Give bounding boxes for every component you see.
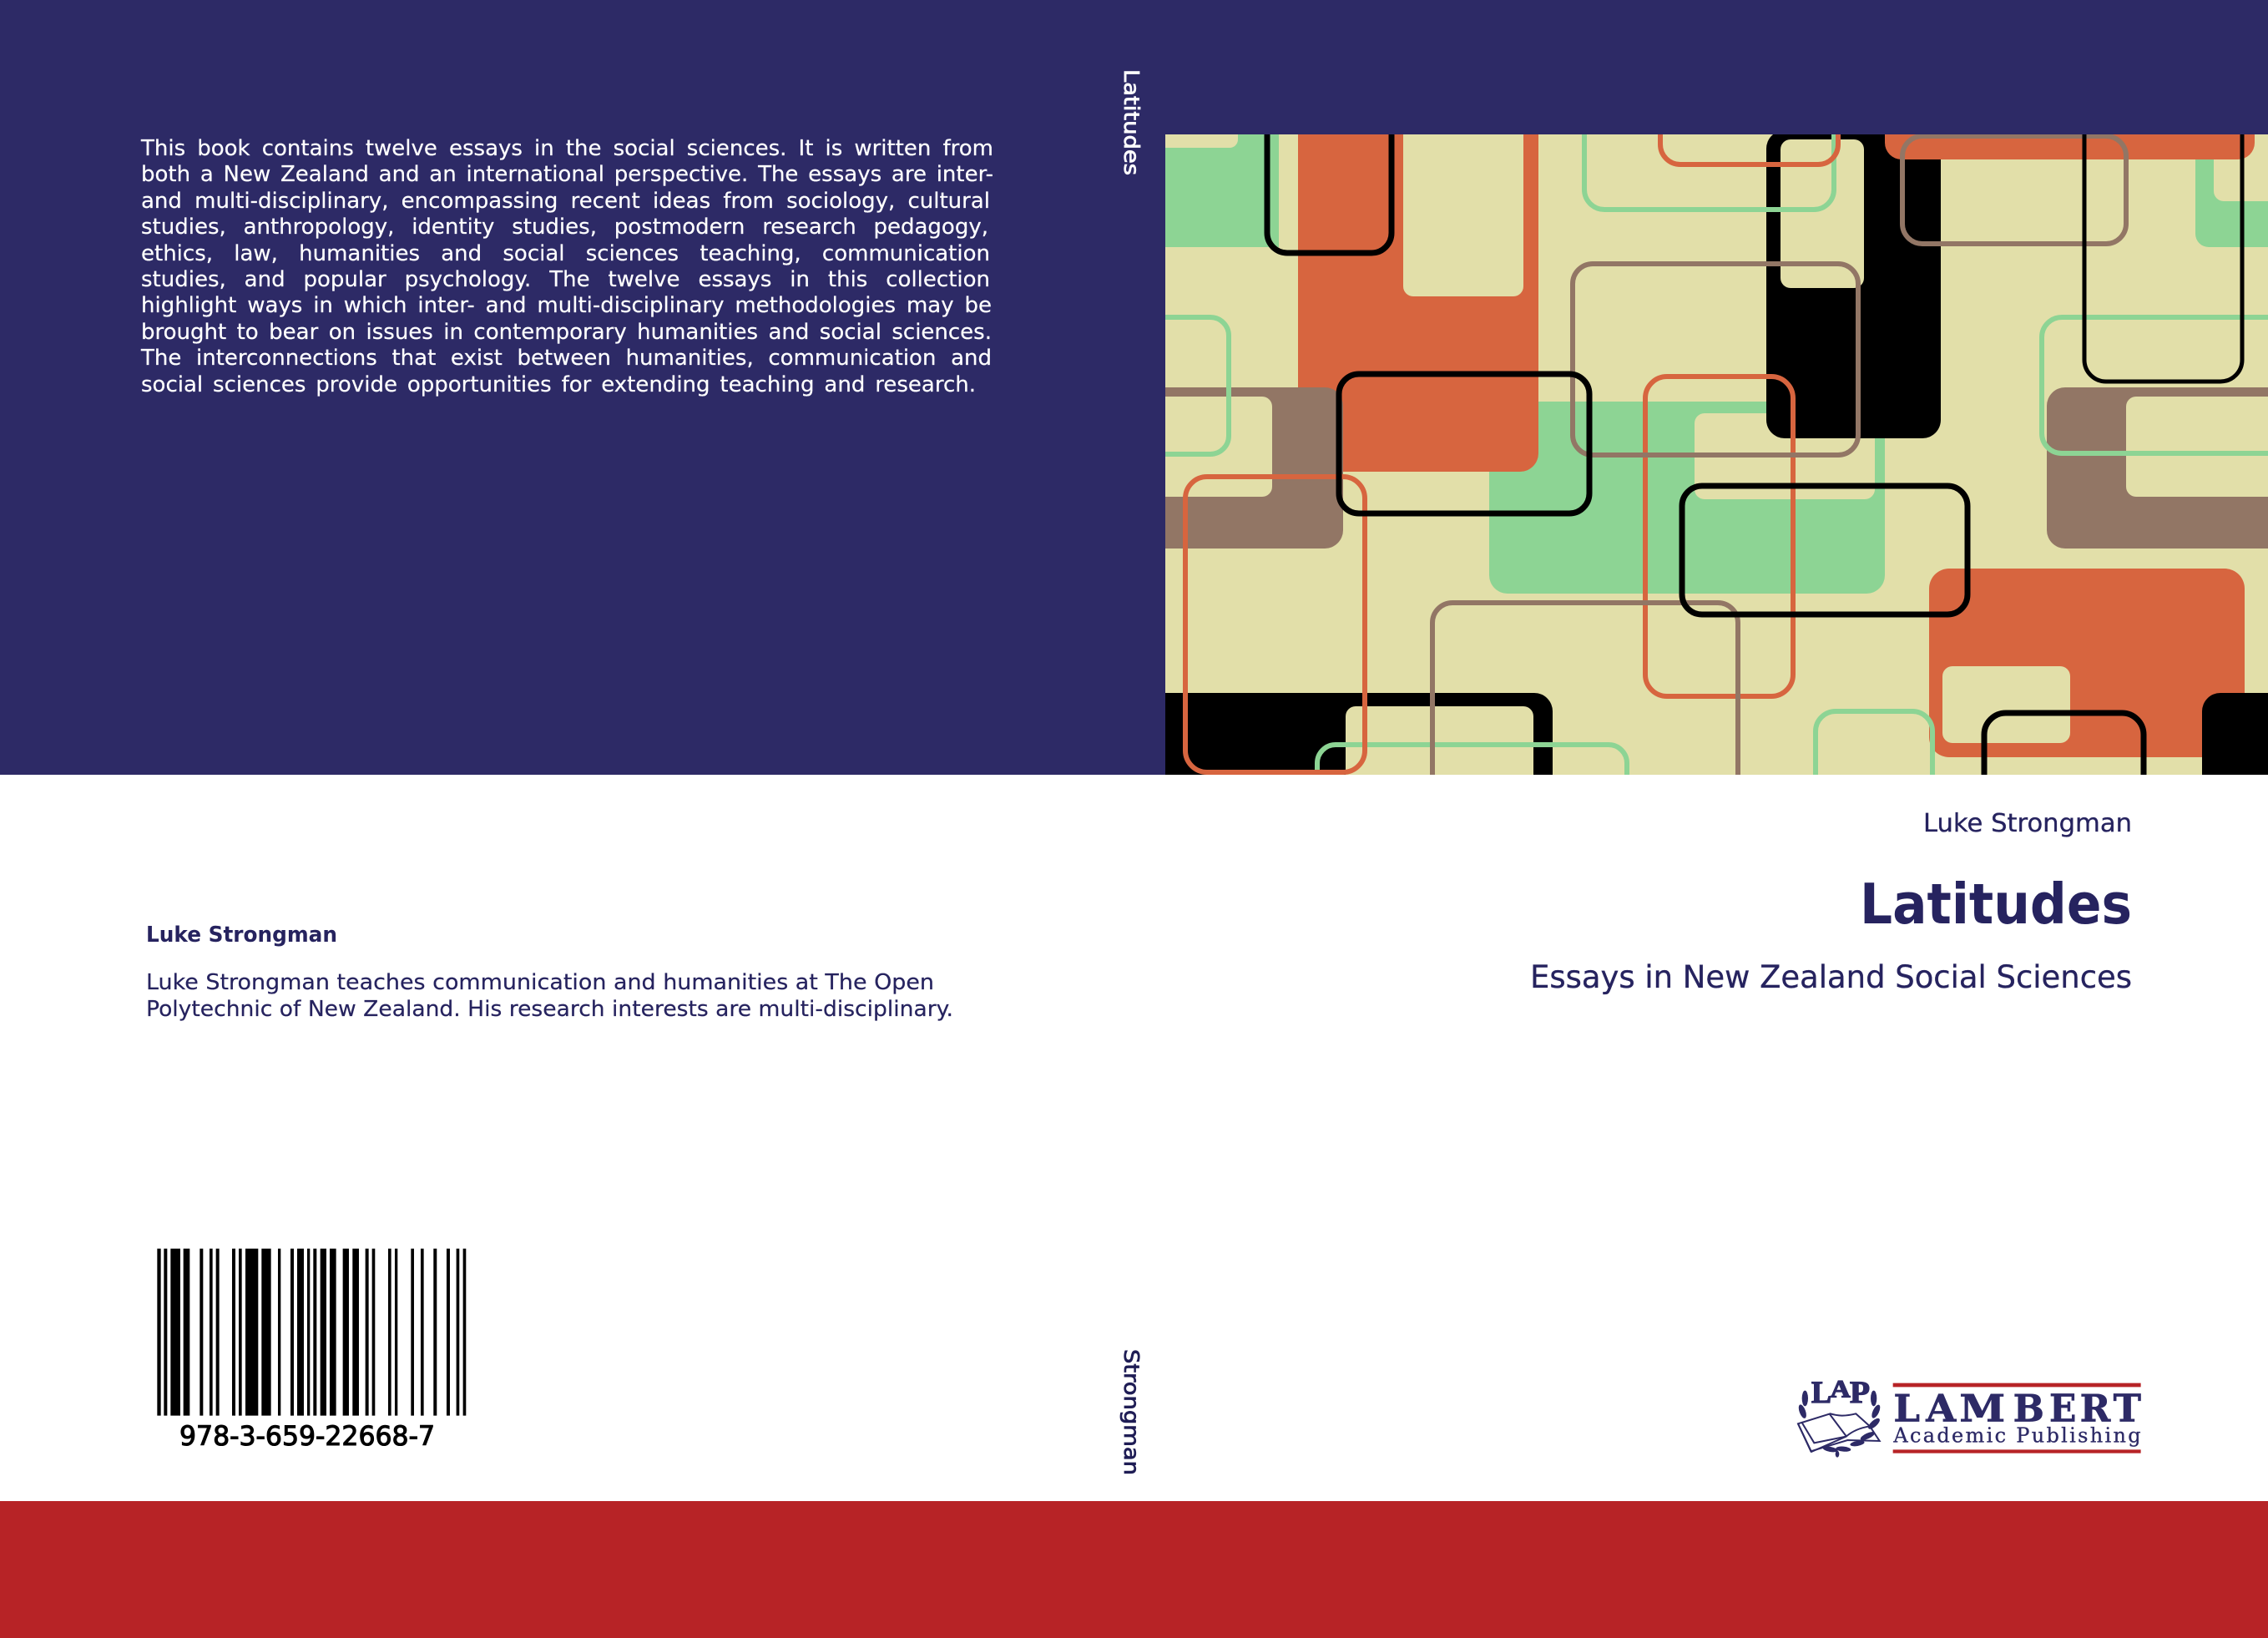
front cover title: Latitudes <box>1860 872 2132 937</box>
text: LAP: L <box>1811 1376 1831 1410</box>
panel: retro rounded rectangles pattern <box>1165 134 2268 775</box>
text: LAP: A <box>1831 1376 1851 1403</box>
back cover blurb: highlight ways in which inter- and multi-disciplinary methodologies may be <box>141 293 992 318</box>
back cover blurb: studies, and popular psychology. The twelve essays in this collection <box>141 267 990 292</box>
back cover blurb: studies, anthropology, identity studies, postmodern research pedagogy, <box>141 215 988 240</box>
back cover blurb <box>140 136 993 397</box>
text: LAMBERT: A <box>1925 1386 1957 1431</box>
author bio text <box>146 970 953 1022</box>
text: LAP <box>1811 1376 1870 1410</box>
publisher logo <box>1797 1376 2141 1458</box>
barcode <box>157 1249 466 1416</box>
spine author: Strongman <box>1119 1349 1144 1475</box>
front cover subtitle: Essays in New Zealand Social Sciences <box>1530 959 2132 995</box>
author bio heading: Luke Strongman <box>146 923 337 948</box>
author bio text: Luke Strongman teaches communication and humanities at The Open <box>146 970 934 995</box>
text: LAMBERT: R <box>2080 1386 2111 1431</box>
logo rules <box>1893 1383 2141 1453</box>
front cover author: Luke Strongman <box>1923 809 2132 838</box>
ISBN number: 978-3-659-22668-7 <box>179 1420 435 1452</box>
back cover blurb: The interconnections that exist between humanities, communication and <box>141 346 992 371</box>
back cover blurb: brought to bear on issues in contemporary humanities and social sciences. <box>141 320 992 345</box>
text: LAMBERT: E <box>2049 1386 2076 1431</box>
panel: red bottom band <box>0 1501 2268 1638</box>
text: LAMBERT: L <box>1893 1386 1920 1431</box>
text: LAP: P <box>1850 1376 1870 1410</box>
author bio text: Polytechnic of New Zealand. His research interests are multi-disciplinary. <box>146 997 953 1022</box>
back cover blurb: and multi-disciplinary, encompassing recent ideas from sociology, cultural <box>141 189 990 214</box>
text: LAMBERT: M <box>1959 1386 2005 1431</box>
panel: navy back cover band <box>0 0 2268 775</box>
text: LAMBERT <box>1893 1386 2141 1431</box>
spine title: Latitudes <box>1119 69 1144 175</box>
text: LAMBERT: B <box>2013 1386 2044 1431</box>
text: LAMBERT: T <box>2114 1386 2141 1431</box>
text: Academic Publishing: Academic Publishing <box>1892 1423 2141 1447</box>
icon: book and laurel <box>1797 1391 1882 1458</box>
back cover blurb: This book contains twelve essays in the social sciences. It is written from <box>141 136 993 161</box>
back cover blurb: social sciences provide opportunities for extending teaching and research. <box>141 372 976 397</box>
back cover blurb: both a New Zealand and an international perspective. The essays are inter- <box>141 162 993 187</box>
back cover blurb: ethics, law, humanities and social sciences teaching, communication <box>141 241 990 266</box>
